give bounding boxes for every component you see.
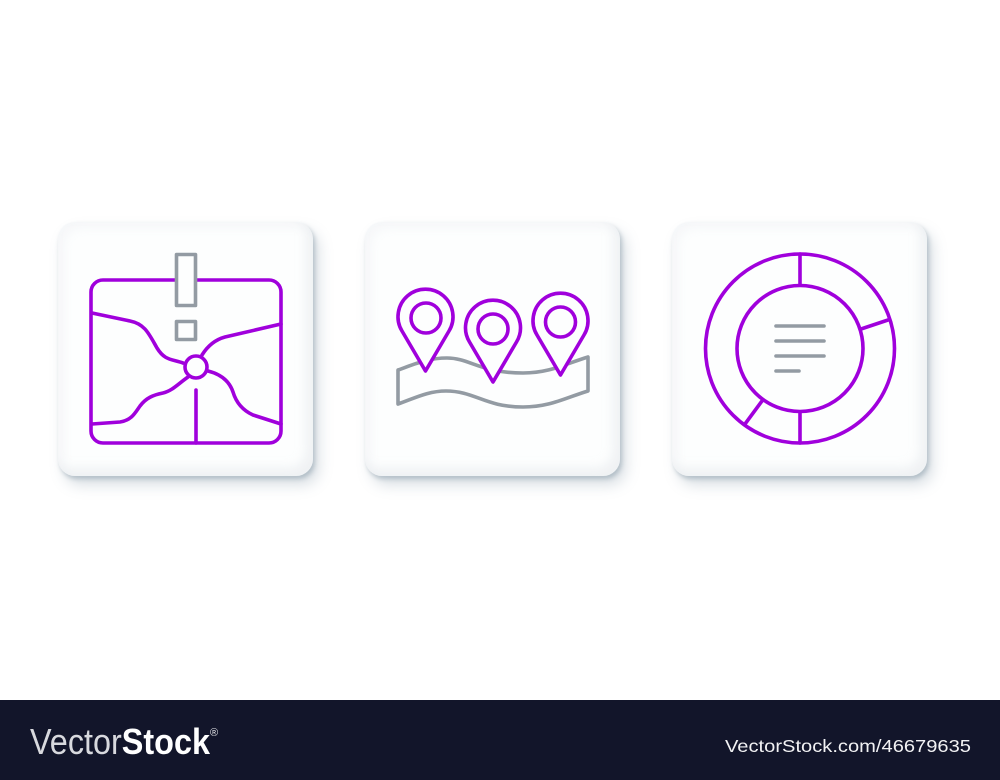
panel: donut chart card bbox=[672, 222, 927, 476]
inner ring bbox=[737, 286, 863, 412]
road: upper right bbox=[202, 324, 281, 355]
exclamation bar bbox=[176, 254, 196, 306]
exclamation dot bbox=[176, 322, 196, 340]
logo registered mark: ® bbox=[210, 727, 218, 739]
footer bar bbox=[0, 700, 1000, 780]
pin 2 bbox=[466, 300, 520, 382]
logo: VectorStock bbox=[30, 721, 211, 762]
panel: map with alert card bbox=[58, 222, 313, 476]
road: bottom vertical bbox=[194, 390, 198, 443]
text lines bbox=[776, 326, 824, 371]
segment dividers bbox=[745, 254, 888, 443]
road: lower left bbox=[92, 377, 188, 424]
icon: donut chart with text lines bbox=[706, 254, 894, 443]
image id: VectorStock.com/46679635 bbox=[725, 736, 971, 756]
outer ring bbox=[706, 254, 894, 443]
wavy ribbon bbox=[398, 357, 588, 407]
junction circle bbox=[185, 356, 207, 378]
icon: map with junction and exclamation mark bbox=[91, 254, 281, 443]
icon: three pins on a wavy ribbon bbox=[398, 289, 588, 407]
road: upper left bbox=[92, 313, 183, 363]
panel: location pins card bbox=[365, 222, 620, 476]
pin 3 bbox=[533, 293, 588, 375]
pin 1 bbox=[398, 289, 453, 371]
road: lower right bbox=[208, 371, 281, 424]
map outline bbox=[91, 280, 281, 443]
